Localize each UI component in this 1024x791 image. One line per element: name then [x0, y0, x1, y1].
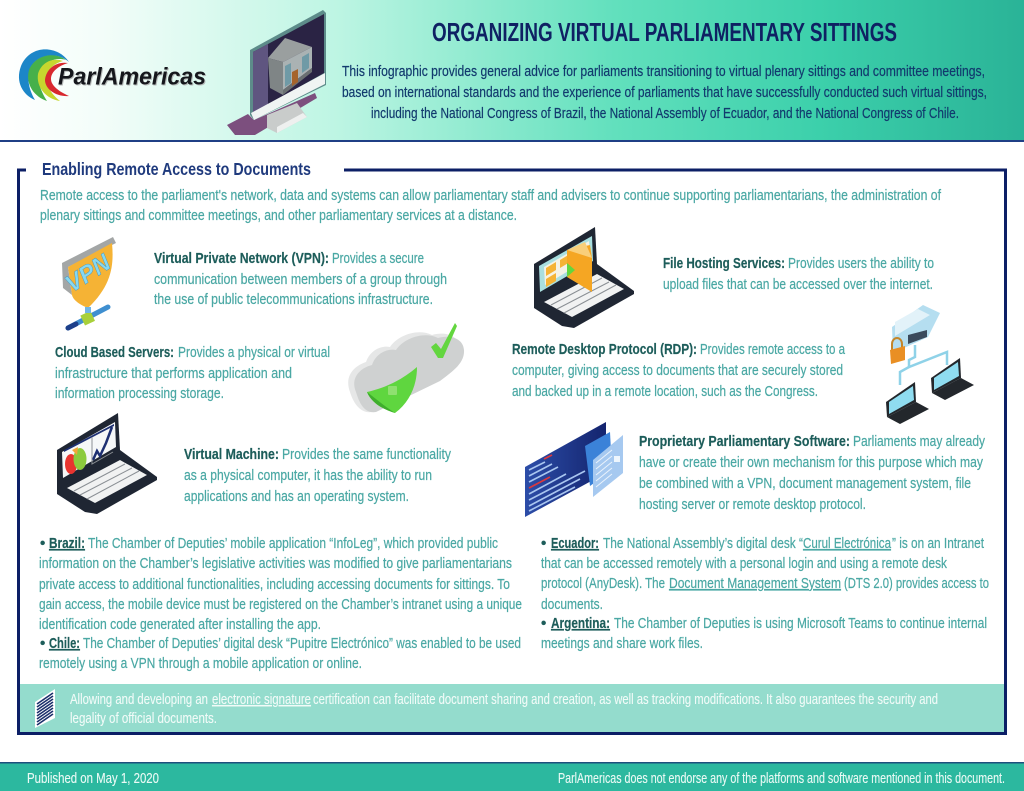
- text: Brazil and Chile examples: [39, 535, 522, 672]
- text: virtual machine: Provides the same functionality: [282, 446, 451, 463]
- icon: VPN shield: [61, 237, 116, 328]
- text: Brazil and Chile examples: The Chamber of Deputies’ digital desk “Pupitre Electrónico” was enabled to be used: [83, 635, 521, 652]
- callout text: [70, 692, 938, 727]
- text: remote desktop protocol: computer, giving access to documents that are securely stored: [512, 362, 843, 379]
- text: file hosting services: Provides users the ability to: [788, 255, 934, 272]
- text: proprietary parliamentary software: Parliaments may already: [853, 433, 985, 450]
- icon: document: [35, 689, 55, 728]
- text: Ecuador and Argentina examples: meetings and share work files.: [541, 635, 703, 652]
- text: remote desktop protocol: Provides remote access to a: [700, 341, 845, 358]
- panel frame: [18, 170, 1006, 734]
- text: Brazil and Chile examples: information on the Chamber’s legislative activities was modified to give parliamentarians: [39, 555, 512, 572]
- text: virtual machine: as a physical computer, it has the ability to run: [184, 467, 432, 484]
- text: Ecuador and Argentina examples: •: [541, 535, 546, 552]
- text: VPN: communication between members of a group through: [154, 271, 447, 288]
- text: Ecuador and Argentina examples: [541, 535, 989, 652]
- text: cloud based servers: [55, 344, 330, 402]
- text: cloud based servers: infrastructure that performs application and: [55, 365, 292, 382]
- text: proprietary parliamentary software: hosting server or remote desktop protocol.: [639, 496, 866, 513]
- callout text: electronic signature: [212, 692, 311, 708]
- intro paragraph: [342, 63, 987, 122]
- text: cloud based servers: Cloud Based Servers:: [55, 344, 174, 361]
- panel: enabling remote access to documents: [18, 159, 1006, 734]
- text: Brazil and Chile examples: remotely using a VPN through a mobile application or online.: [39, 655, 362, 672]
- text: virtual machine: applications and has an operating system.: [184, 488, 409, 505]
- text: Ecuador and Argentina examples: The National Assembly’s digital desk “: [603, 535, 803, 552]
- text: Ecuador and Argentina examples: ” is on an Intranet: [892, 535, 985, 552]
- text: Brazil and Chile examples: gain access, the mobile device must be registered on the Chamber’s intranet using a unique: [39, 596, 522, 613]
- text: Brazil and Chile examples: •: [40, 635, 45, 652]
- icon: code window with documents: [525, 422, 623, 517]
- text: file hosting services: [663, 255, 934, 293]
- text: proprietary parliamentary software: Proprietary Parliamentary Software:: [639, 433, 850, 450]
- text: Ecuador and Argentina examples: Argentina:: [551, 615, 610, 632]
- text: remote desktop protocol: Remote Desktop Protocol (RDP):: [512, 341, 697, 358]
- icon: laptop with file folder: [534, 227, 634, 328]
- text: Ecuador and Argentina examples: Curul Electrónica: [803, 535, 892, 552]
- text: VPN: [154, 250, 447, 308]
- logo: ParlAmericas: ParlAmericas: [58, 64, 206, 90]
- text: cloud based servers: information processing storage.: [55, 385, 224, 402]
- text: Ecuador and Argentina examples: Document Management System: [669, 575, 841, 592]
- publication date: Published on May 1, 2020: [27, 771, 159, 787]
- text: file hosting services: File Hosting Services:: [663, 255, 785, 272]
- header banner: [0, 0, 1024, 142]
- text: file hosting services: upload files that can be accessed over the internet.: [663, 276, 933, 293]
- icon: VPN shield: VPN: [61, 249, 116, 298]
- text: Brazil and Chile examples: Brazil:: [49, 535, 85, 552]
- text: virtual machine: [184, 446, 451, 505]
- callout text: legality of official documents.: [70, 711, 217, 727]
- icon: desktop monitor with parliament building: [227, 10, 326, 135]
- text: Ecuador and Argentina examples: documents.: [541, 596, 603, 613]
- panel intro text: plenary sittings and committee meetings, and other parliamentary services at a distance.: [40, 207, 517, 224]
- text: virtual machine: Virtual Machine:: [184, 446, 279, 463]
- text: Brazil and Chile examples: Chile:: [49, 635, 80, 652]
- text: remote desktop protocol: [512, 341, 845, 400]
- logo: ParlAmericas: [19, 49, 207, 101]
- text: VPN: Provides a secure: [332, 250, 424, 267]
- text: VPN: Virtual Private Network (VPN):: [154, 250, 329, 267]
- text: proprietary parliamentary software: [639, 433, 985, 513]
- text: Ecuador and Argentina examples: •: [541, 615, 546, 632]
- text: Brazil and Chile examples: The Chamber of Deputies’ mobile application “InfoLeg”, which provided public: [88, 535, 498, 552]
- icon: laptop with charts: [57, 413, 157, 514]
- text: Ecuador and Argentina examples: Ecuador:: [551, 535, 599, 552]
- panel intro text: [40, 187, 942, 224]
- text: Brazil and Chile examples: identification code generated after installing the app.: [39, 616, 321, 633]
- logo: ParlAmericas: ParlAmericas: [59, 64, 207, 92]
- panel heading: Enabling Remote Access to Documents: [42, 159, 311, 179]
- callout: electronic signature: [20, 684, 1004, 732]
- icon: secure network with folder and laptops: [886, 305, 974, 424]
- icon: cloud with shield and check: [348, 323, 464, 413]
- text: VPN: the use of public telecommunications infrastructure.: [154, 291, 433, 308]
- text: cloud based servers: Provides a physical or virtual: [178, 344, 330, 361]
- text: Ecuador and Argentina examples: protocol (AnyDesk). The: [541, 575, 665, 592]
- text: remote desktop protocol: and backed up in a remote location, such as the Congress.: [512, 383, 818, 400]
- callout text: Allowing and developing an: [70, 692, 208, 708]
- text: Brazil and Chile examples: private access to additional functionalities, including accessing documents for sittings. To: [39, 576, 510, 593]
- text: Brazil and Chile examples: •: [40, 535, 45, 552]
- footer bar: [0, 762, 1024, 791]
